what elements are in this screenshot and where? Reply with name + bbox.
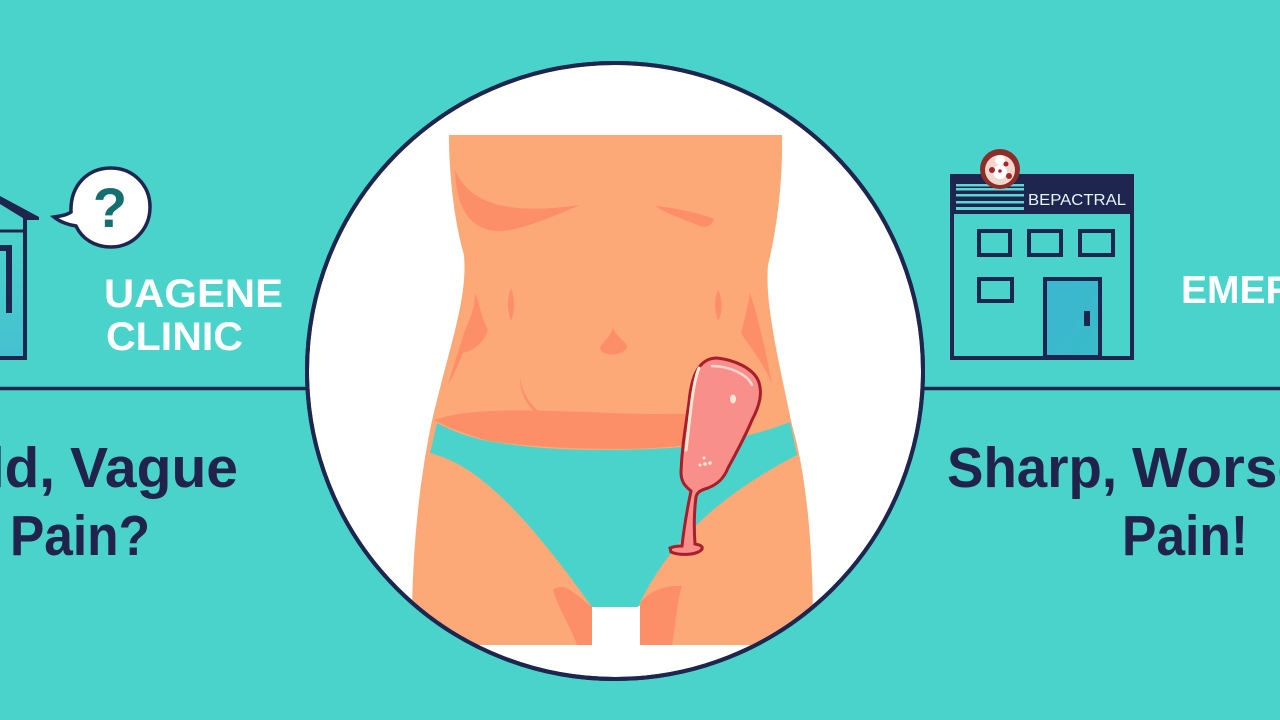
hospital windows bbox=[979, 231, 1113, 301]
right caption: sharp, worsening pain: Sharp, bbox=[947, 436, 1117, 500]
hospital sign band: BEPACTRAL bbox=[1028, 192, 1126, 209]
icon: hospital building bbox=[951, 149, 1133, 358]
central body circle bbox=[307, 63, 923, 679]
underwear bbox=[430, 422, 797, 607]
clinic label: UAGENE bbox=[104, 272, 283, 316]
icon: inflamed appendix bbox=[670, 358, 760, 554]
torso bbox=[412, 135, 813, 645]
left caption: mild, vague pain: Pain? bbox=[10, 504, 150, 568]
icon: question speech bubble bbox=[54, 168, 150, 247]
icon: question speech bubble: ? bbox=[93, 176, 127, 239]
hospital sign band bbox=[951, 174, 1133, 214]
left caption: mild, vague pain bbox=[0, 436, 238, 568]
body creases bbox=[434, 170, 772, 645]
clinic label: CLINIC bbox=[106, 315, 243, 359]
right caption: sharp, worsening pain bbox=[947, 436, 1280, 568]
clinic label bbox=[104, 272, 283, 359]
hospital emblem bbox=[980, 149, 1020, 189]
right caption: sharp, worsening pain: Pain! bbox=[1122, 504, 1248, 568]
hospital door bbox=[1045, 279, 1100, 357]
left caption: mild, vague pain: Vague bbox=[70, 436, 238, 500]
icon: urgent clinic building bbox=[0, 196, 39, 358]
